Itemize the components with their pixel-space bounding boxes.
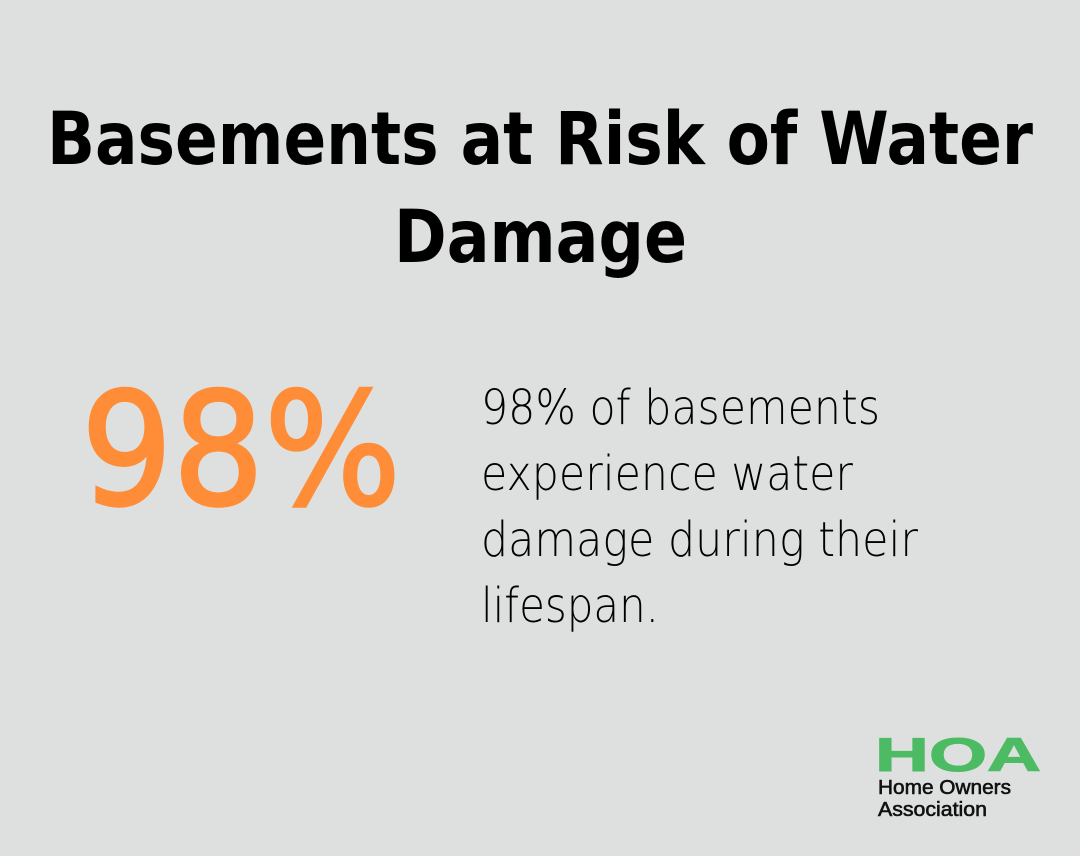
- description text: [481, 380, 918, 634]
- description text: lifespan.: [481, 578, 659, 634]
- big statistic: 98%: 98%: [81, 359, 401, 541]
- logo wordmark: Home Owners: [878, 777, 1011, 799]
- description text: 98% of basements: [481, 380, 880, 436]
- logo mark: HOA: HOA: [875, 728, 1041, 781]
- logo wordmark: [878, 777, 1011, 821]
- title: [47, 97, 1033, 280]
- logo: Home Owners Association: [875, 728, 1041, 821]
- title: Damage: [394, 195, 687, 280]
- logo wordmark: Association: [878, 799, 987, 821]
- description text: damage during their: [481, 512, 918, 568]
- description text: experience water: [481, 446, 853, 502]
